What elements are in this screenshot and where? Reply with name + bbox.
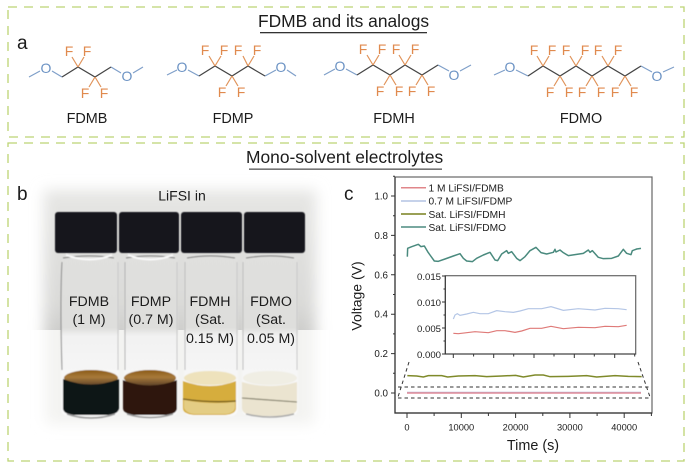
molecule: FDMO: F: [548, 42, 556, 58]
legend: Sat. LiFSI/FDMH: [428, 210, 505, 221]
molecule: FDMO: O: [505, 59, 516, 75]
vial label: FDMH Sat. 0.15 M: FDMH: [190, 294, 230, 310]
molecule: FDMO: F: [565, 84, 573, 100]
molecule: FDMB: O: [122, 68, 133, 84]
vial: FDMP: [119, 212, 179, 418]
molecule: FDMB: F: [83, 43, 91, 59]
molecule: FDMH: [324, 41, 471, 99]
vial label: FDMO Sat. 0.05 M: (Sat.: [256, 312, 286, 328]
heading: FDMB and its analogs: FDMB and its analogs: [258, 11, 429, 31]
inset curve: 0.7 M LiFSI/FDMP: [453, 307, 627, 319]
vial label: FDMB 1 M: FDMB: [69, 294, 109, 310]
molecule: FDMB: O: [41, 60, 52, 76]
x axis tick labels: 30000: [557, 422, 583, 432]
zoom region: dashed box with guide lines: [398, 362, 650, 398]
y axis tick labels: 0.0: [374, 388, 389, 400]
y axis tick labels: 0.6: [374, 270, 389, 281]
x axis tick labels: 20000: [503, 422, 529, 432]
vial label: FDMO Sat. 0.05 M: 0.05 M): [247, 331, 295, 347]
y axis tick labels: [374, 192, 389, 400]
molecule: FDMH: F: [411, 41, 419, 57]
panel letter a: a: [17, 33, 28, 54]
caption: LiFSI in: LiFSI in: [158, 188, 206, 204]
molecule: FDMO: F: [611, 84, 619, 100]
vial label: FDMH Sat. 0.15 M: 0.15 M): [186, 331, 234, 347]
curve: Sat. LiFSI/FDMO: [407, 244, 641, 262]
molecule: FDMO: O: [652, 68, 663, 84]
molecule: FDMO: F: [594, 42, 602, 58]
molecule: FDMP: F: [234, 42, 242, 58]
molecule: FDMP: F: [220, 42, 228, 58]
inset chart: [417, 272, 636, 361]
legend: Sat. LiFSI/FDMO: [428, 223, 506, 234]
vial label: FDMB 1 M: (1 M): [72, 312, 106, 328]
panel letter b: b: [17, 184, 28, 205]
molecule: FDMH: F: [408, 83, 416, 99]
y axis tick labels: 0.4: [374, 310, 389, 321]
molecule: FDMP: O: [177, 59, 188, 75]
molecule: FDMO: F: [581, 42, 589, 58]
inset tick labels: [417, 272, 441, 361]
curve: 1 M LiFSI/FDMB and 0.7 M LiFSI/FDMP: [407, 391, 641, 394]
molecule: FDMH: F: [427, 83, 435, 99]
molecule: FDMO: F: [530, 42, 538, 58]
molecule: FDMO: F: [546, 84, 554, 100]
molecule: FDMH: F: [359, 41, 367, 57]
x axis tick labels: 0: [404, 422, 410, 432]
vial: FDMO: [242, 212, 305, 417]
molecule: FDMP: [167, 42, 296, 100]
label: FDMO: FDMO: [560, 111, 602, 127]
curve: Sat. LiFSI/FDMH: [407, 375, 642, 377]
molecule: FDMB: F: [81, 85, 89, 101]
vial: FDMB: [55, 212, 119, 418]
inset tick labels: 0.010: [417, 298, 441, 309]
inset curve: 1 M LiFSI/FDMB: [453, 325, 627, 334]
legend: 0.7 M LiFSI/FDMP: [428, 196, 512, 208]
molecule: FDMH: F: [395, 83, 403, 99]
molecule: FDMH: O: [449, 67, 460, 83]
molecule: FDMB: F: [65, 43, 73, 59]
y axis tick labels: 0.2: [374, 349, 388, 360]
inset tick labels: 0.005: [417, 324, 441, 335]
y axis tick labels: 1.0: [374, 192, 389, 202]
molecule: FDMP: F: [218, 84, 226, 100]
molecule: FDMP: F: [253, 42, 261, 58]
molecule: FDMB: F: [100, 85, 108, 101]
molecule: FDMH: F: [376, 83, 384, 99]
label: FDMP: FDMP: [213, 111, 253, 127]
molecule: FDMH: F: [392, 41, 400, 57]
label: FDMH: FDMH: [373, 111, 415, 127]
photo: four vials of LiFSI solutions: [44, 188, 316, 424]
line chart: voltage vs time: [348, 176, 652, 454]
vial label: FDMH Sat. 0.15 M: (Sat.: [195, 312, 225, 328]
vial label: FDMP 0.7 M: FDMP: [131, 294, 171, 310]
panel: Mono-solvent electrolytes: [8, 143, 684, 461]
molecule: FDMO: F: [578, 84, 586, 100]
label: FDMB: FDMB: [67, 111, 107, 127]
molecule: FDMP: F: [201, 42, 209, 58]
y axis title: Voltage (V): [348, 261, 364, 331]
molecule: FDMO: F: [562, 42, 570, 58]
molecule: FDMP: F: [237, 84, 245, 100]
vial: FDMH: [181, 212, 242, 416]
panel: FDMB and its analogs: [8, 7, 684, 137]
x axis tick labels: 10000: [448, 422, 474, 432]
molecule: FDMP: O: [276, 59, 287, 75]
molecule: FDMO: F: [630, 84, 638, 100]
y axis tick labels: 0.8: [374, 231, 389, 242]
vial label: FDMP 0.7 M: (0.7 M): [129, 312, 173, 328]
molecule: FDMB: [29, 43, 143, 101]
molecule: FDMO: [494, 42, 674, 100]
legend: 1 M LiFSI/FDMB: [428, 184, 504, 194]
x axis title: Time (s): [507, 438, 559, 454]
molecule: FDMH: F: [378, 41, 386, 57]
vial label: FDMO Sat. 0.05 M: FDMO: [250, 294, 292, 310]
panel letter c: c: [344, 184, 354, 205]
x axis tick labels: 40000: [611, 422, 637, 432]
inset tick labels: 0.000: [417, 350, 441, 361]
legend: [401, 184, 512, 234]
inset tick labels: 0.015: [417, 272, 441, 283]
molecule: FDMO: F: [614, 42, 622, 58]
molecule: FDMO: F: [597, 84, 605, 100]
heading: Mono-solvent electrolytes: Mono-solvent electrolytes: [246, 147, 443, 167]
molecule: FDMH: O: [335, 58, 346, 74]
x axis tick labels: [404, 422, 637, 432]
